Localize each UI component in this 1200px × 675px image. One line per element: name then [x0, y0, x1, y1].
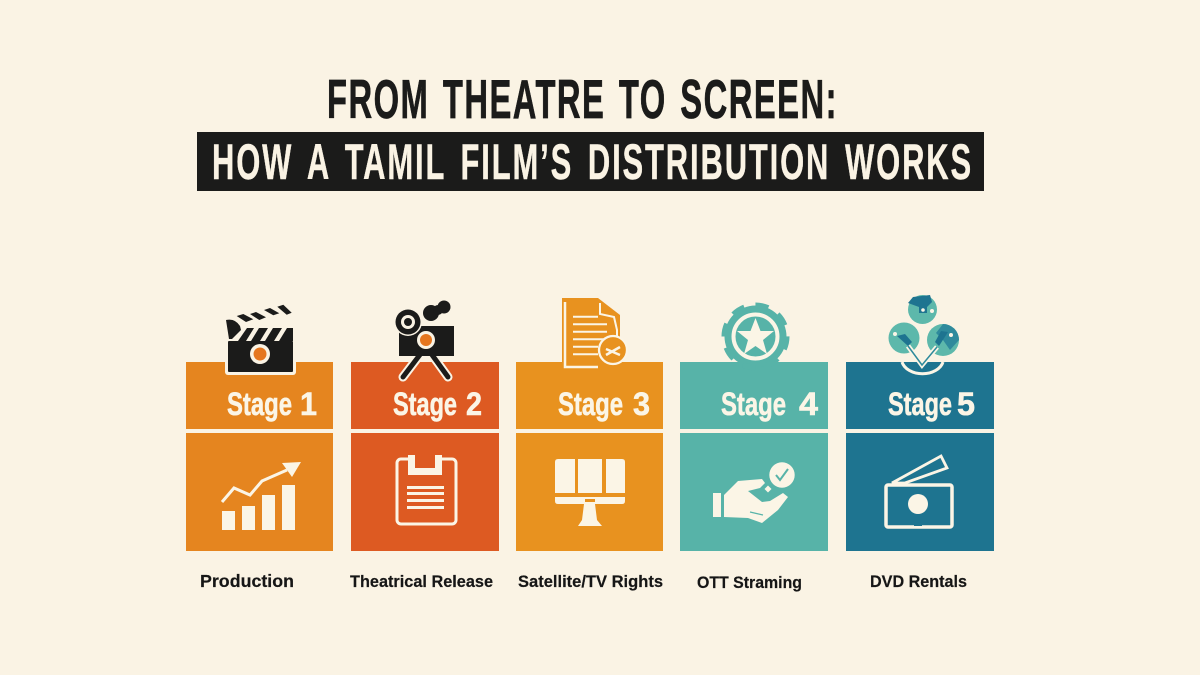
stage 2 header block	[351, 362, 499, 429]
stage 1 heading: 1	[300, 386, 317, 422]
stage 1 body block	[186, 433, 333, 551]
stage 3 label: Satellite/TV Rights	[518, 572, 663, 591]
stage 4 label: OTT Straming	[697, 573, 802, 592]
icon: hand receiving check	[713, 462, 795, 523]
stage 4 heading: Stage	[721, 386, 786, 422]
stage 3 header block	[516, 362, 663, 429]
panel: stage 2 theatrical release	[350, 300, 499, 591]
title	[197, 68, 984, 191]
stage 4 heading: 4	[799, 386, 818, 422]
stage 4 header block	[680, 362, 828, 429]
stage 5 header block	[846, 362, 994, 429]
stage 5 body block	[846, 433, 994, 551]
stage 1 heading: Stage	[227, 386, 292, 422]
stage 2 label: Theatrical Release	[350, 572, 493, 591]
stage 1 header block	[186, 362, 333, 429]
stage 3 heading: Stage	[558, 386, 623, 422]
icon: clipboard document	[397, 453, 456, 524]
title banner	[197, 132, 984, 191]
stage 5 heading: Stage	[888, 386, 952, 422]
stage 3 body block	[516, 433, 663, 551]
stage 2 heading: 2	[466, 386, 482, 422]
panel: stage 1 production	[186, 305, 333, 591]
stage 2 body block	[351, 433, 499, 551]
stage 1 label: Production	[200, 571, 294, 591]
icon: segmented monitor	[555, 459, 625, 526]
panel: stage 3 satellite and tv rights	[516, 298, 663, 591]
icon: rising bar chart	[222, 462, 301, 530]
panel: stage 5 dvd rentals	[846, 295, 994, 591]
icon: three discs in a bowl	[888, 295, 959, 374]
title line one: FROM THEATRE TO SCREEN:	[327, 68, 838, 130]
icon: gear with star	[724, 306, 786, 368]
stage 5 heading: 5	[957, 386, 975, 422]
icon: contract document	[562, 298, 627, 372]
icon: clapperboard	[225, 305, 296, 375]
panel: stage 4 ott streaming	[680, 306, 828, 592]
stage 4 body block	[680, 433, 828, 551]
stage 3 heading: 3	[633, 386, 650, 422]
stage 2 heading: Stage	[393, 386, 457, 422]
icon: screen with flap	[886, 456, 952, 527]
stage 5 label: DVD Rentals	[870, 572, 967, 591]
icon: film camera on tripod	[394, 300, 454, 377]
